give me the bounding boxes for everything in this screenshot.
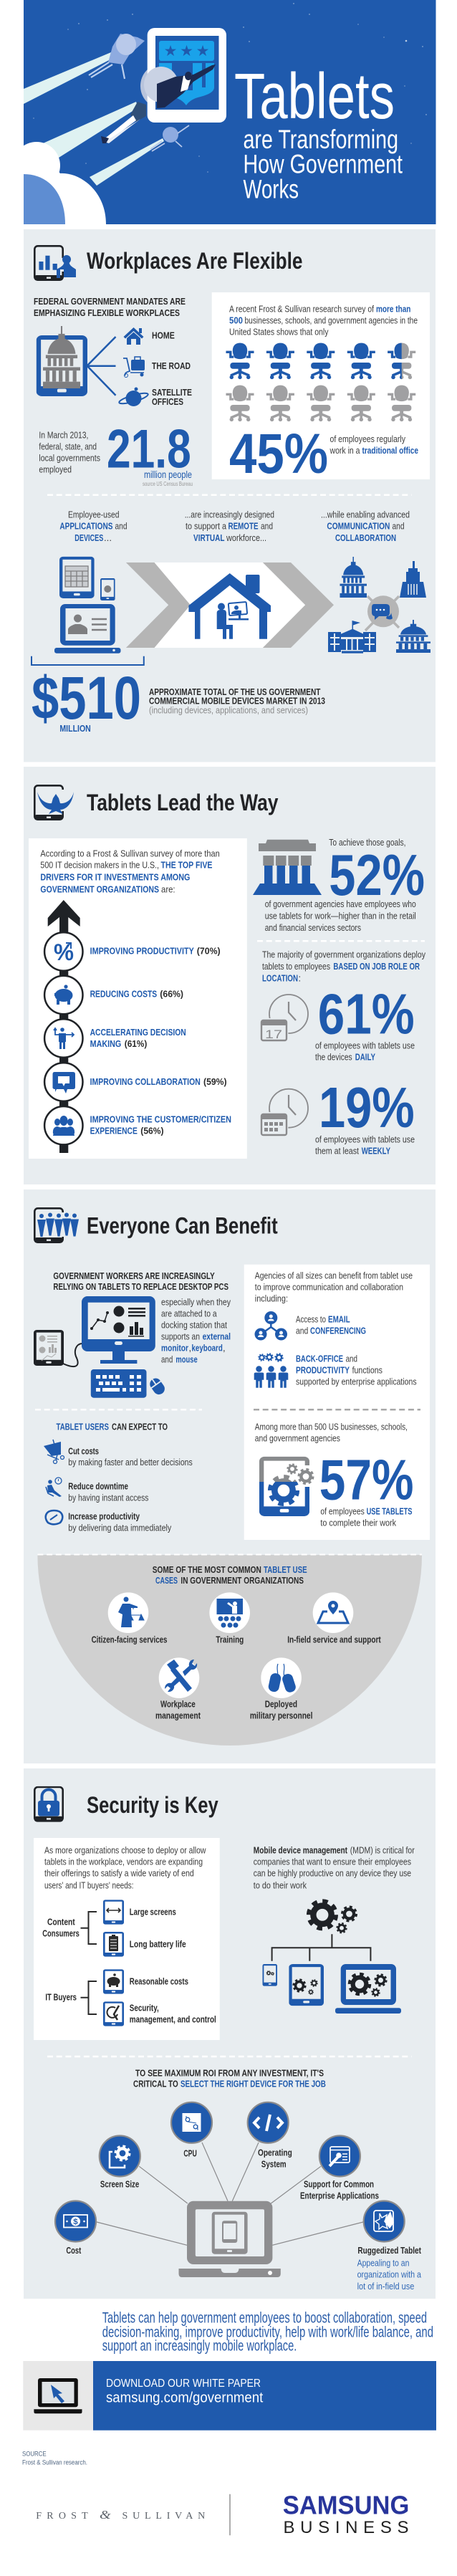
panel: survey [212, 292, 430, 485]
driver 5: EXPERIENCE [90, 1126, 138, 1136]
label: long battery life: Long battery life [130, 1938, 186, 1949]
factor: operating system: System [261, 2159, 287, 2170]
panel: everyone can benefit [24, 1189, 436, 1763]
icon: speed gauge [46, 1510, 62, 1524]
text: docking station: , [223, 1343, 226, 1354]
survey text: A recent Frost & Sullivan research survey of [229, 304, 374, 315]
panel: buyers needs [34, 1838, 220, 2040]
stat: 45%: traditional office [362, 445, 418, 456]
driver 2: REDUCING COSTS [90, 989, 157, 1000]
icon: gears and people [254, 1354, 288, 1388]
icon: clock with week calendar [259, 1089, 308, 1137]
text: remote and virtual: VIRTUAL [193, 532, 225, 543]
text: communication and collaboration [321, 509, 410, 543]
text: mobile device market: APPROXIMATE TOTAL OF THE US GOVERNMENT [149, 686, 320, 697]
jetpack figure lower [150, 125, 189, 151]
label: the road: THE ROAD [152, 360, 191, 371]
icon: tablet, phone, laptop [54, 557, 120, 653]
logo: samsung business: BUSINESS [284, 2518, 408, 2537]
needs text: their offerings to satisfy a wide variety of end [44, 1868, 194, 1879]
text: reduce downtime: by having instant access [68, 1492, 149, 1503]
drivers intro: THE TOP FIVE [160, 860, 213, 871]
needs text: As more organizations choose to deploy or allow [44, 1845, 206, 1856]
survey text: 500 [229, 315, 243, 326]
download text: DOWNLOAD OUR WHITE PAPER [106, 2378, 261, 2390]
factor: screen size [100, 2135, 140, 2190]
icon: tablet with capitol [37, 326, 87, 396]
logo: frost and sullivan: & [100, 2508, 112, 2522]
use cases heading: IN GOVERNMENT ORGANIZATIONS [181, 1575, 304, 1586]
icon: home [123, 327, 143, 345]
stat: 57%: USE TABLETS [367, 1506, 413, 1517]
subheading: mandates [34, 296, 186, 318]
stat: 45%: work in a [329, 445, 360, 456]
subheading: replace desktop: RELYING ON TABLETS TO REPLACE DESKTOP PCS [53, 1281, 228, 1292]
panel: use cases semicircle [37, 1555, 422, 1746]
text: mobile device management [254, 1845, 415, 1891]
factor: cost: $ [73, 2218, 78, 2226]
text: employed: employed [39, 464, 72, 475]
stat: 45% [229, 421, 418, 485]
agencies text [255, 1270, 413, 1304]
label: large screens: Large screens [130, 1907, 176, 1917]
stat: 45%: 45% [229, 421, 328, 485]
logo: samsung business: SAMSUNG [283, 2490, 409, 2519]
text: deployment: BASED ON JOB ROLE OR [333, 961, 420, 972]
text: communication and collaboration: ...while enabling advanced [321, 509, 410, 520]
stat: 61% [315, 982, 415, 1062]
text: employed: federal, state, and [39, 441, 97, 452]
icon: battery tablet [103, 1932, 124, 1957]
icon: connected government buildings [328, 557, 430, 653]
stat: 52%: To achieve those goals, [329, 837, 405, 848]
source [22, 2450, 87, 2466]
stat: 57%: to complete their work [320, 1518, 396, 1528]
stat: 61%: DAILY [355, 1051, 375, 1062]
icon: cut costs [44, 1440, 64, 1463]
logo: frost and sullivan: FROST [36, 2511, 88, 2522]
stat: 45%: of employees regularly [329, 434, 405, 444]
icon: tablet with eagle [34, 785, 74, 820]
use case: citizen-facing services [92, 1592, 168, 1645]
text: docking station: supports an [161, 1331, 200, 1342]
driver 1: (70%) [197, 946, 221, 957]
subheading: tablet users: TABLET USERS [56, 1422, 109, 1432]
source: SOURCE [22, 2450, 47, 2457]
heading: right device: CRITICAL TO [133, 2079, 178, 2089]
logo: frost and sullivan [36, 2508, 205, 2522]
title: are Transforming [244, 125, 398, 154]
stat: 21.8 million: million people [144, 469, 192, 480]
bracket [32, 656, 144, 665]
use cases heading [153, 1564, 307, 1586]
text: docking station [161, 1297, 231, 1365]
drivers intro: GOVERNMENT ORGANIZATIONS [40, 884, 159, 895]
closing statement: support an increasingly mobile workplace. [102, 2338, 297, 2355]
driver 3 [44, 1019, 186, 1058]
heading: Tablets Lead the Way [87, 790, 278, 815]
header banner [13, 0, 436, 224]
closing statement [102, 2310, 433, 2355]
chevron arrow with house [126, 562, 334, 648]
text: communication and collaboration: and [393, 521, 404, 532]
driver 3: ACCELERATING DECISION [90, 1027, 186, 1038]
panel: workplaces are flexible [24, 229, 436, 762]
text: mobile device management: can be highly productive on any device they use [254, 1868, 411, 1879]
tablet with shield [140, 28, 226, 123]
factor: operating system [248, 2102, 292, 2170]
logo: frost and sullivan: SULLIVAN [122, 2511, 205, 2522]
label: content consumers: Consumers [42, 1928, 80, 1939]
text: back-office and productivity: functions [352, 1365, 383, 1376]
needs text: users' and IT buyers' needs: [44, 1880, 133, 1891]
use case: deployed military personnel [250, 1657, 312, 1721]
icon: temple columns [253, 840, 322, 895]
icon: laptop with nested devices [179, 2201, 281, 2277]
heading: Everyone Can Benefit [87, 1213, 278, 1239]
factor: cost [55, 2201, 96, 2256]
text: employed [39, 430, 100, 475]
text: reduce downtime [68, 1480, 149, 1503]
icon: connected people [255, 1311, 287, 1340]
text: email and conferencing: and [296, 1326, 308, 1336]
label: home: HOME [152, 330, 175, 341]
text: mobile device market [149, 686, 325, 716]
label: it buyers: IT Buyers [45, 1992, 77, 2003]
heading: right device [133, 2068, 326, 2089]
tablet with shield: ★ [164, 42, 177, 59]
jetpack figure top [89, 34, 145, 79]
text: applications and devices: APPLICATIONS [59, 521, 113, 532]
text: communication and collaboration: COMMUNICATION [327, 521, 390, 532]
text: remote and virtual: to support a [186, 521, 227, 532]
subheading: tablet users: CAN EXPECT TO [112, 1422, 168, 1432]
subheading: replace desktop [53, 1270, 228, 1292]
driver 4: (59%) [203, 1076, 227, 1087]
icon: clock with date 17 [259, 995, 308, 1043]
driver 5 [44, 1106, 231, 1144]
driver 1 [44, 932, 221, 971]
subheading: tablet users [56, 1422, 168, 1432]
label: satellite offices [152, 387, 192, 407]
needs text: tablets in the workplace, vendors are expanding [44, 1857, 203, 1867]
drivers intro: According to a Frost & Sullivan survey of more than [40, 848, 220, 859]
agencies text: Agencies of all sizes can benefit from tablet use [255, 1270, 413, 1281]
stat: $510 million: MILLION [59, 723, 91, 734]
connecting lines [97, 2142, 363, 2245]
factor: operating system: Operating [258, 2148, 292, 2158]
stat: 57%: 57% [319, 1448, 414, 1512]
clouds [24, 142, 106, 224]
panel: tablets lead the way [24, 767, 436, 1184]
stat: 19%: of employees with tablets use [315, 1134, 415, 1144]
icon: tablet with lock [34, 1787, 63, 1821]
factor: ruggedized tablet: Ruggedized Tablet [357, 2245, 422, 2256]
driver 3: MAKING [90, 1038, 121, 1049]
text: applications and devices: and [115, 521, 128, 532]
stat: 21.8 million: source US Census Bureau [143, 481, 193, 487]
label: content consumers [42, 1917, 80, 1939]
text: mobile device management: to do their work [254, 1880, 307, 1891]
icon: tablet with gears [259, 1457, 316, 1516]
use case: in-field service and support: In-field service and support [287, 1634, 381, 1645]
use case: citizen-facing services: Citizen-facing services [92, 1634, 168, 1645]
label: security management control: Security, [130, 2003, 159, 2014]
superhero figure [101, 64, 216, 143]
label: security management control: management, and control [130, 2014, 216, 2025]
text: email and conferencing: Access to [296, 1314, 326, 1325]
text: communication and collaboration: COLLABORATION [335, 532, 396, 543]
use case: in-field service and support [287, 1592, 381, 1645]
use case: workplace management: management [155, 1710, 201, 1721]
subheading: replace desktop: GOVERNMENT WORKERS ARE INCREASINGLY [53, 1270, 215, 1281]
title: How Government [244, 149, 403, 179]
title: Works [244, 175, 299, 204]
text: increase productivity: by delivering data immediately [68, 1523, 172, 1533]
text: cut costs: Cut costs [68, 1445, 99, 1456]
stat: 19%: WEEKLY [362, 1145, 390, 1156]
driver 2 [44, 976, 183, 1014]
icon: house with remote worker [188, 573, 271, 639]
text: email and conferencing: EMAIL [328, 1314, 350, 1325]
use case: training [209, 1592, 250, 1645]
use cases heading: SOME OF THE MOST COMMON [153, 1564, 261, 1575]
rocket beams [24, 52, 164, 186]
factor: screen size: Screen Size [100, 2179, 139, 2190]
stat: 19% [315, 1076, 415, 1156]
drivers intro: 500 IT decision makers in the U.S., [40, 860, 159, 871]
use cases heading: TABLET USE [264, 1564, 307, 1575]
use case: workplace management [155, 1657, 201, 1721]
stat: 61%: 61% [318, 982, 415, 1046]
stat: 57% [319, 1448, 414, 1528]
text: applications and devices: DEVICES [74, 532, 104, 543]
stat: 21.8 million: 21.8 [107, 419, 191, 480]
text: docking station: and [161, 1354, 173, 1365]
branching lines [87, 337, 116, 396]
call to action [23, 2361, 436, 2431]
text: cut costs [68, 1445, 193, 1467]
use cases heading: CASES [155, 1575, 178, 1586]
diagram: device management [262, 1901, 401, 2014]
text: back-office and productivity: PRODUCTIVITY [296, 1365, 350, 1376]
use case: deployed military personnel: Deployed [265, 1699, 297, 1710]
text: docking station: docking station that [161, 1320, 227, 1331]
text: deployment: tablets to employees [262, 961, 330, 972]
label: content consumers: Content [47, 1917, 75, 1928]
stat: 52%: of government agencies have employees who [265, 899, 416, 909]
text: applications and devices [59, 509, 128, 543]
icon: satellite planet [118, 387, 149, 406]
subheading: mandates: FEDERAL GOVERNMENT MANDATES ARE [34, 296, 186, 307]
text: applications and devices: ... [104, 532, 112, 543]
stat: 61%: the devices [315, 1051, 352, 1062]
text: mobile device management: Mobile device management [254, 1845, 348, 1856]
text: cut costs: by making faster and better decisions [68, 1457, 193, 1467]
panel: top five drivers [29, 838, 247, 1159]
factor: enterprise applications [300, 2135, 379, 2201]
text: among businesses: and government agencies [255, 1433, 340, 1444]
tablet with shield: ★ [180, 42, 193, 59]
factor: cost: Cost [66, 2245, 82, 2256]
text: remote and virtual [185, 509, 274, 543]
text: back-office and productivity [296, 1354, 417, 1387]
driver 4 [44, 1063, 227, 1101]
text: mobile device management: (MDM) is critical for [350, 1845, 415, 1856]
use case: training: Training [216, 1634, 244, 1645]
factor: cpu [171, 2102, 212, 2158]
stat: 57%: of employees [320, 1506, 365, 1517]
text: employed: In March 2013, [39, 430, 88, 441]
driver 5: IMPROVING THE CUSTOMER/CITIZEN [90, 1114, 231, 1125]
icon: docked desktop [34, 1296, 167, 1398]
star field [33, 3, 427, 173]
logo: samsung business [283, 2490, 409, 2537]
stat: 52% [265, 837, 425, 933]
agencies text: including: [255, 1293, 288, 1304]
text: deployment [262, 949, 425, 983]
text: back-office and productivity: and [346, 1354, 357, 1364]
icon: security tablet [103, 2001, 124, 2026]
driver 4: IMPROVING COLLABORATION [90, 1076, 201, 1087]
label: reasonable costs: Reasonable costs [130, 1976, 188, 1986]
text: email and conferencing: CONFERENCING [310, 1326, 366, 1336]
text: deployment: LOCATION [262, 972, 298, 983]
stat: $510 million: $510 [32, 664, 141, 732]
heading: right device: TO SEE MAXIMUM ROI FROM ANY INVESTMENT, IT'S [135, 2068, 324, 2079]
tablet with shield: ★ [196, 42, 209, 59]
factor: enterprise applications: Enterprise Applications [300, 2190, 379, 2201]
icon: piggy bank tablet [103, 1969, 124, 1994]
use case: workplace management: Workplace [160, 1699, 196, 1710]
text: among businesses [255, 1422, 408, 1444]
text: remote and virtual: REMOTE [228, 521, 259, 532]
driver 2: (66%) [160, 989, 183, 1000]
text: mobile device market: COMMERCIAL MOBILE DEVICES MARKET IN 2013 [149, 696, 325, 707]
drivers intro [40, 848, 220, 895]
driver 5: (56%) [140, 1126, 164, 1136]
text: docking station: are attached to a [161, 1308, 217, 1319]
factor: ruggedized tablet: Appealing to an [357, 2257, 409, 2268]
use case: deployed military personnel: military personnel [250, 1710, 312, 1721]
icon: tablet with chart and person [34, 246, 76, 281]
text: increase productivity [68, 1511, 172, 1533]
factor: ruggedized tablet [357, 2201, 422, 2292]
text: email and conferencing [296, 1314, 366, 1336]
heading: right device: SELECT THE RIGHT DEVICE FOR THE JOB [181, 2079, 326, 2089]
text: mobile device management: companies that want to ensure their employees [254, 1857, 411, 1867]
agencies text: to improve communication and collaboration [255, 1282, 403, 1293]
drivers intro: are: [161, 884, 175, 895]
icon: large screen tablet [103, 1900, 124, 1925]
text: docking station: external [203, 1331, 231, 1342]
bracket [80, 1981, 97, 2014]
stat: 19%: 19% [319, 1076, 415, 1139]
label: satellite offices: OFFICES [152, 396, 183, 407]
factor: ruggedized tablet: lot of in-field use [357, 2281, 414, 2292]
icon: tablet with people [34, 1208, 79, 1242]
stat: 61%: of employees with tablets use [315, 1040, 415, 1050]
stat: 19%: them at least [315, 1145, 359, 1156]
label: satellite offices: SATELLITE [152, 387, 192, 398]
factor: cpu: CPU [183, 2148, 197, 2158]
text: applications and devices: Employee-used [68, 509, 119, 520]
icon: waiting seat [46, 1478, 62, 1497]
text: docking station: keyboard [192, 1343, 223, 1354]
survey text: United States shows that only [229, 327, 329, 337]
driver 1: % [54, 939, 74, 965]
label: security management control [130, 2003, 216, 2025]
text: back-office and productivity: supported by enterprise applications [296, 1376, 417, 1387]
text: increase productivity: Increase productivity [68, 1511, 140, 1522]
text: deployment: : [298, 972, 301, 983]
needs text [44, 1845, 206, 1891]
text: remote and virtual: and [261, 521, 273, 532]
survey text [229, 304, 418, 337]
text: docking station: monitor [161, 1343, 188, 1354]
stat: 52%: and financial services sectors [265, 922, 361, 933]
stat: 52%: use tablets for work—higher than in the retail [265, 911, 416, 921]
text: remote and virtual: ...are increasingly designed [185, 509, 274, 520]
pictogram: office chairs [226, 343, 415, 421]
panel: agencies of all sizes [244, 1265, 430, 1540]
survey text: more than [376, 304, 410, 315]
title [234, 61, 403, 204]
driver 1: IMPROVING PRODUCTIVITY [90, 946, 194, 957]
stat: 52%: 52% [329, 843, 425, 908]
title: Tablets [234, 61, 395, 133]
heading: Workplaces Are Flexible [87, 248, 302, 274]
arrow [48, 900, 80, 1153]
download text: samsung.com/government [106, 2390, 264, 2406]
factor: enterprise applications: Support for Common [304, 2179, 374, 2190]
icon: laptop with cursor [34, 2378, 82, 2413]
download text [106, 2378, 264, 2406]
text: docking station: especially when they [161, 1297, 231, 1308]
text: remote and virtual: workforce... [226, 532, 266, 543]
text: reduce downtime: Reduce downtime [68, 1480, 128, 1491]
heading: Security is Key [87, 1792, 218, 1818]
panel: security is key [24, 1768, 436, 2299]
icon: clock with date 17: 17 [265, 1028, 282, 1041]
text: docking station: mouse [175, 1354, 198, 1365]
drivers intro: DRIVERS FOR IT INVESTMENTS AMONG [40, 872, 190, 883]
bracket [80, 1912, 97, 1944]
source: Frost & Sullivan research. [22, 2458, 87, 2466]
factor: ruggedized tablet: organization with a [357, 2269, 422, 2279]
text: docking station: , [189, 1343, 191, 1354]
text: among businesses: Among more than 500 US businesses, schools, [255, 1422, 408, 1432]
text: mobile device market: (including devices, applications, and services) [149, 705, 308, 716]
driver 3: (61%) [125, 1038, 147, 1049]
icon: luggage cart [123, 357, 145, 377]
subheading: mandates: EMPHASIZING FLEXIBLE WORKPLACES [34, 307, 180, 318]
text: back-office and productivity: BACK-OFFICE [296, 1354, 343, 1364]
text: employed: local governments [39, 453, 100, 464]
